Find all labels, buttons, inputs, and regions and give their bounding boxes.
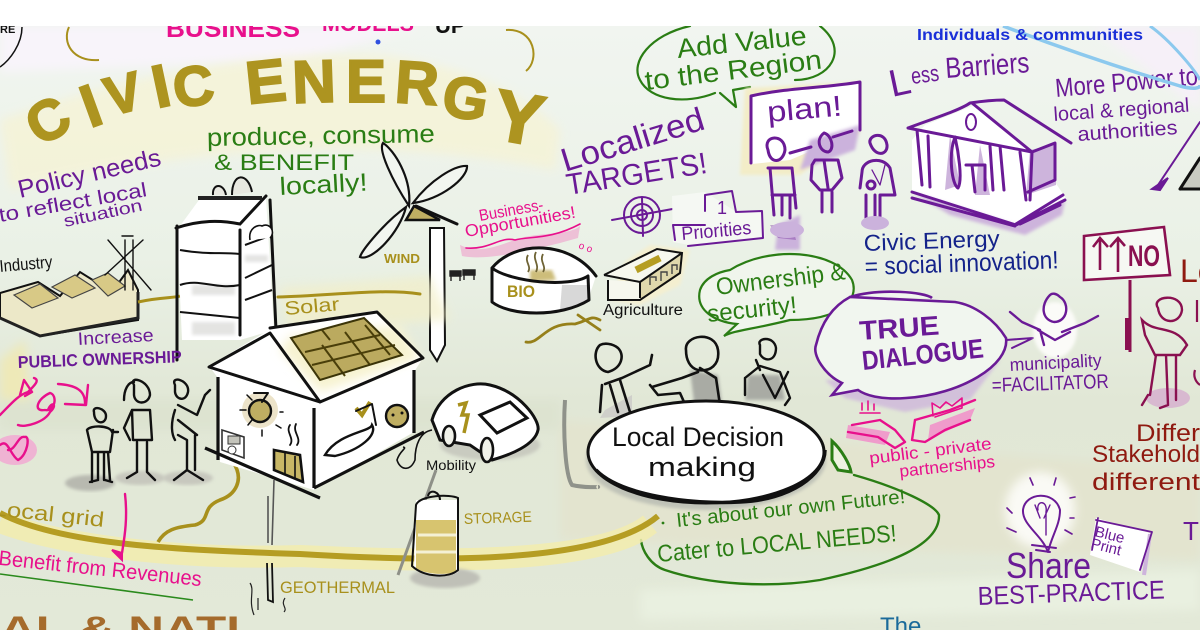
text: civic energy = social innovation: = social innovation! (864, 246, 1059, 281)
text: less barriers (885, 47, 1030, 106)
solar house (205, 310, 424, 545)
text: civic energy = social innovation (863, 225, 1059, 281)
figure: municipality facilitator (991, 294, 1109, 397)
text: policy needs to reflect local situation (0, 144, 164, 231)
speech bubble: our own future, cater to local needs: Cater to LOCAL NEEDS! (656, 520, 898, 568)
title: Civic Energy: G (438, 63, 493, 135)
icon: agriculture barn: Agriculture (603, 302, 683, 319)
table: local decision making (586, 401, 826, 510)
icon: office tower with birds (176, 177, 276, 360)
text: less barriers: Barriers (944, 47, 1030, 85)
table: local decision making: Local Decision (612, 422, 784, 452)
text: business opportunities: Opportunities! (463, 203, 577, 241)
speech bubble: true dialogue: DIALOGUE (860, 333, 985, 376)
text: produce, consume & benefit locally: & BENEFIT (214, 150, 354, 175)
text: less barriers: ess (909, 60, 940, 89)
figure: municipality facilitator: =FACILITATOR (991, 371, 1109, 397)
title: Civic Energy: V (98, 61, 148, 128)
text: share best practice: Share (1006, 545, 1091, 586)
wind turbine (360, 143, 467, 361)
text: right edge fragments: T (1183, 516, 1199, 546)
title: Civic Energy: R (393, 48, 441, 118)
speech bubble: ownership and security (699, 254, 854, 336)
icon: priorities podium (672, 191, 765, 246)
title: Civic Energy: N (291, 48, 337, 116)
figures: public ownership group (17, 325, 213, 491)
icon: agriculture barn (526, 245, 690, 342)
text: localized targets: TARGETS! (564, 147, 709, 202)
title: Civic Energy: C (169, 52, 218, 120)
icon: priorities podium: 1 (717, 198, 727, 218)
text: right edge fragments: Differ (1136, 420, 1200, 447)
industry roofs and pylon (0, 236, 180, 336)
planning board with people: plan! (766, 91, 843, 129)
text: business opportunities: o o (577, 240, 594, 256)
title: Civic Energy: Y (487, 75, 550, 162)
wind turbine: WIND (384, 251, 420, 266)
figure: municipality facilitator: municipality (1009, 350, 1102, 375)
text: more power to local and regional authorities: authorities (1077, 117, 1178, 146)
speech bubble: ownership and security: security! (706, 292, 798, 328)
text: policy needs to reflect local situation: situation (62, 196, 144, 231)
geothermal pipe (250, 563, 395, 615)
solar power line: Solar (284, 294, 341, 320)
industry roofs and pylon: Industry (0, 252, 54, 276)
title: Civic Energy: C (15, 83, 81, 157)
title: Civic Energy: I (146, 52, 176, 121)
protest sign: no wind turbines: NO (1128, 240, 1160, 273)
scribble brackets and header fragments: BUSINESS (166, 15, 300, 43)
arrow to regional authorities (1152, 122, 1200, 190)
scribble brackets and header fragments: UP (435, 13, 466, 38)
figures: public ownership group: Increase (77, 325, 154, 349)
figure: protester (1142, 298, 1190, 408)
text: benefit from revenues: Benefit from Revenues (0, 547, 203, 591)
title: Civic Energy: E (242, 46, 289, 117)
icon: storage battery (398, 470, 532, 588)
speech bubble: true dialogue: TRUE (858, 310, 940, 346)
text: share best practice (977, 545, 1165, 611)
figures: public ownership group: PUBLIC OWNERSHIP (17, 347, 182, 372)
icon: pink piggy bank (0, 378, 88, 465)
text: more power to local and regional authorities: local & regional (1053, 95, 1190, 126)
icon: public-private handshake: public - private (868, 434, 993, 468)
scribble brackets and header fragments: MODELS (322, 11, 414, 36)
geothermal pipe: GEOTHERMAL (280, 578, 395, 597)
icon: target (612, 197, 678, 236)
local grid line (0, 400, 658, 559)
title: Civic Energy: I (72, 72, 110, 140)
speech bubble: add value to the region (637, 21, 835, 107)
protest sign: no wind turbines (1084, 227, 1170, 352)
figures: people at the table (596, 337, 790, 422)
text: less barriers: L (885, 60, 915, 106)
text: produce, consume & benefit locally: produce, consume (207, 120, 435, 152)
icon: light bulb with blueprint (1005, 472, 1152, 575)
icon: electric car (397, 384, 540, 473)
text: right edge fragments: Stakehold (1092, 441, 1200, 468)
text: policy needs to reflect local situation: to reflect local (0, 179, 149, 227)
speech bubble: our own future, cater to local needs (641, 441, 939, 584)
blue swoosh and text: individuals and communities: Individuals & communities (917, 27, 1143, 44)
icon: public-private handshake: partnerships (898, 452, 996, 481)
icon: town hall temple (908, 100, 1071, 235)
icon: light bulb with blueprint: Blue (1093, 523, 1126, 547)
text: benefit from revenues (0, 494, 203, 600)
planning board with people (740, 82, 895, 250)
icon: electric car: Mobility (426, 457, 476, 473)
icon: biogas dome: BIO (507, 282, 535, 301)
table: local decision making: making (648, 452, 756, 482)
text: policy needs to reflect local situation: Policy needs (15, 144, 164, 204)
scribble brackets and header fragments: RE (0, 24, 15, 36)
title: Civic Energy (14, 46, 550, 162)
speech bubble: our own future, cater to local needs: It's about our own Future! (675, 486, 906, 532)
text: produce, consume & benefit locally (207, 120, 435, 201)
solar power line (278, 276, 450, 330)
text: share best practice: BEST-PRACTICE (977, 574, 1165, 611)
text: more power to local and regional authorities (1053, 61, 1199, 146)
text: civic energy = social innovation: Civic Energy (863, 225, 1001, 256)
top white strip (0, 0, 1200, 26)
text: business opportunities (460, 197, 594, 257)
blue swoosh and text: individuals and communities (917, 26, 1200, 88)
text: localized targets: Localized (556, 100, 709, 179)
scribble brackets and header fragments (0, 11, 534, 71)
text: business opportunities: Business- (478, 197, 545, 225)
text: right edge fragments: different (1092, 469, 1200, 496)
icon: biogas dome (450, 248, 596, 314)
icon: storage battery: STORAGE (464, 509, 532, 528)
speech bubble: ownership and security: Ownership & (714, 258, 847, 301)
icon: light bulb with blueprint: Print (1089, 535, 1124, 560)
speech bubble: add value to the region: Add Value (675, 21, 808, 64)
icon: public-private handshake (846, 398, 996, 481)
speech bubble: add value to the region: to the Region (643, 44, 823, 96)
title: Civic Energy: E (346, 48, 386, 115)
speech bubble: true dialogue (815, 292, 1033, 412)
text: right edge fragments (1092, 253, 1200, 546)
text: produce, consume & benefit locally: locally! (279, 168, 368, 201)
icon: priorities podium: Priorities (681, 218, 752, 245)
